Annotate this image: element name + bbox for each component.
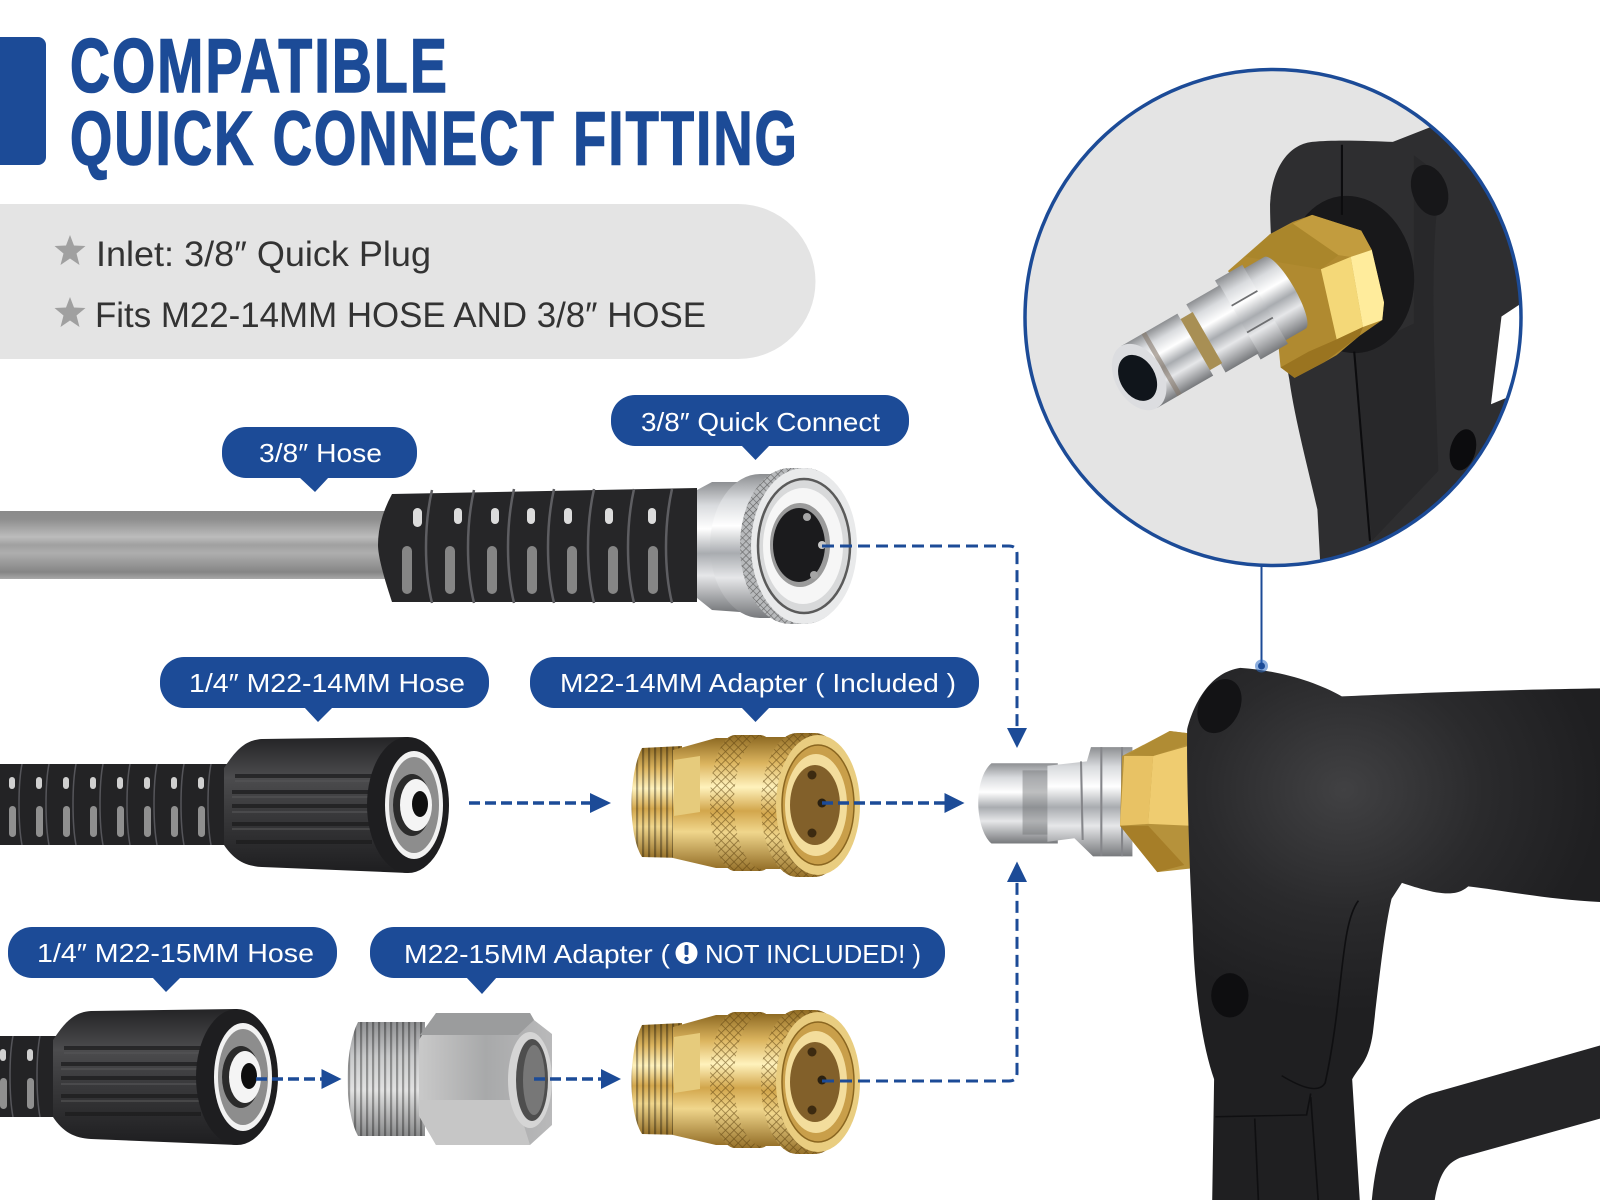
detail: silver plug [1118, 256, 1308, 408]
silver quick connect coupler [697, 468, 857, 624]
arrow: second brass adapter to plug [822, 862, 1027, 1081]
black spring guard [378, 488, 697, 603]
label: M22-15MM adapter not included: NOT INCLUDED! ) [705, 939, 921, 969]
gun quick plug [978, 747, 1132, 856]
gun screw hole top [1190, 674, 1249, 738]
gray hose [0, 511, 390, 579]
connector line to detail [1255, 565, 1268, 672]
label: M22-15MM adapter not included: M22-15MM Adapter ( [404, 939, 670, 969]
photo: M22-15MM hose [0, 1009, 278, 1145]
photo: second brass adapter [632, 1010, 860, 1154]
icon: warning [676, 942, 698, 964]
label: 3/8 quick connect: 3/8″ Quick Connect [641, 407, 881, 437]
label: M22-15MM adapter not included [370, 927, 945, 994]
spec panel background [0, 204, 815, 359]
gun trigger lever [1371, 1042, 1600, 1200]
label: M22-15MM hose: 1/4″ M22-15MM Hose [37, 938, 314, 968]
label: 3/8 quick connect [611, 395, 909, 460]
photo: M22-15MM steel adapter [348, 1013, 552, 1145]
arrow: hose to steel adapter [256, 1069, 342, 1089]
title [70, 24, 799, 182]
detail: brass nut [1228, 215, 1384, 378]
gun seams [1215, 901, 1358, 1200]
label: 3/8 hose: 3/8″ Hose [259, 438, 382, 468]
gun brass nut [1120, 731, 1190, 872]
title: COMPATIBLE [70, 24, 449, 109]
panel: specifications [0, 204, 815, 359]
gun screw hole lower [1211, 973, 1249, 1017]
label: M22-14MM hose: 1/4″ M22-14MM Hose [189, 668, 465, 698]
detail circle [1025, 70, 1561, 576]
label: M22-14MM hose [160, 657, 489, 722]
arrow: steel adapter to brass adapter [534, 1069, 621, 1089]
photo: M22-14MM hose [0, 737, 449, 873]
label: M22-15MM hose [8, 927, 337, 992]
spec: inlet: Inlet: 3/8″ Quick Plug [96, 235, 431, 274]
arrow: brass adapter to plug [822, 793, 964, 813]
icon: star two [54, 297, 86, 327]
spec: fits: Fits M22-14MM HOSE AND 3/8″ HOSE [95, 296, 706, 335]
title: QUICK CONNECT FITTING [70, 96, 799, 182]
icon: star one [54, 235, 86, 265]
arrow: hose to brass adapter [469, 793, 611, 813]
arrow: quick connect to plug [822, 546, 1027, 748]
gun grip body [1187, 668, 1600, 1200]
label: M22-14MM adapter: M22-14MM Adapter ( Included ) [560, 668, 956, 698]
title accent bar [0, 37, 46, 165]
photo: M22-14MM brass adapter [632, 733, 860, 877]
label: M22-14MM adapter [530, 657, 979, 722]
photo: 3/8 hose with quick connect [0, 468, 857, 624]
detail: gun head [1270, 128, 1520, 560]
label: 3/8 hose [222, 427, 417, 492]
photo: pressure washer gun [978, 668, 1600, 1200]
